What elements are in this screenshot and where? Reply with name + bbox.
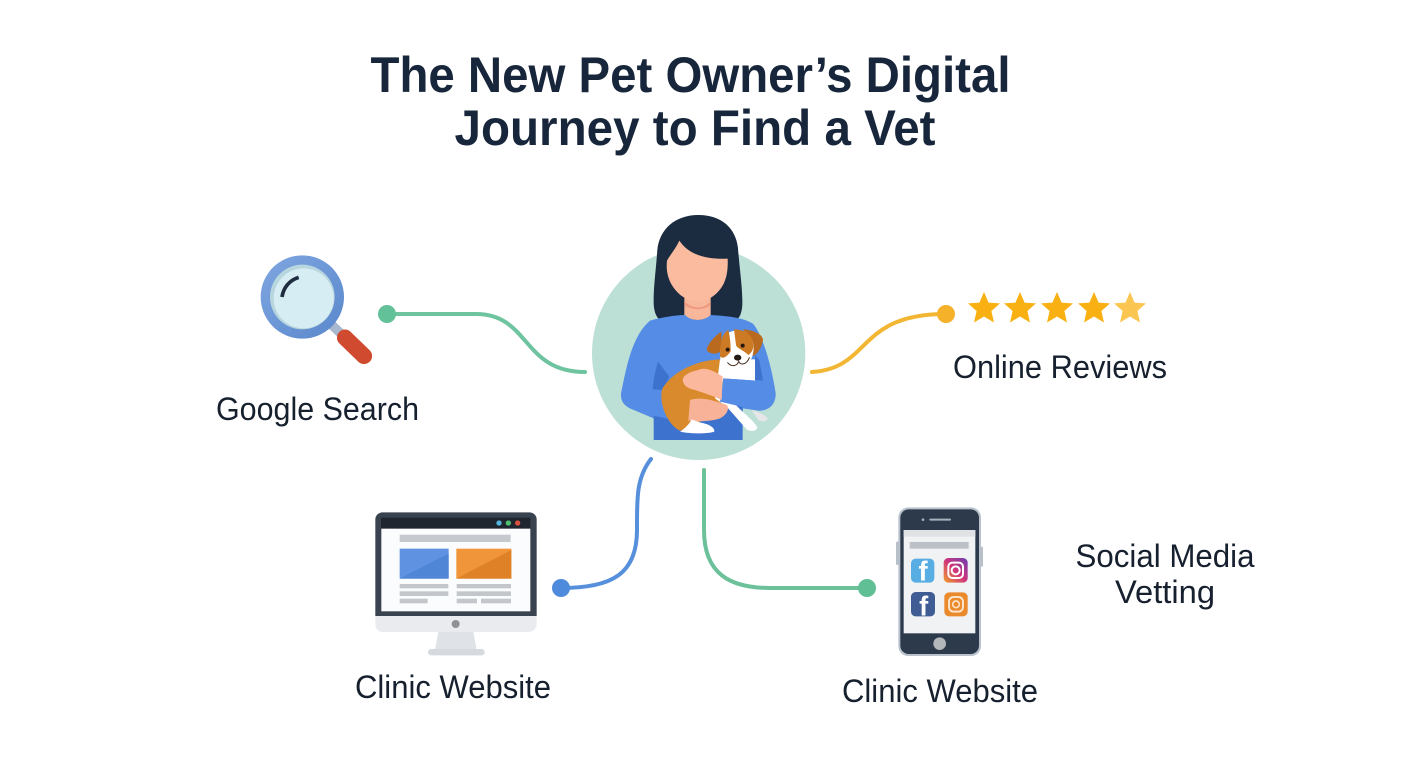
neck [684, 297, 711, 320]
sweater fold shadows [653, 362, 669, 390]
icon: Facebook dark [911, 590, 935, 621]
icon: smartphone with social apps [896, 507, 983, 656]
label: Social Media Vetting [1076, 538, 1255, 610]
puppy head [720, 330, 754, 370]
connector: person to Clinic Website [552, 459, 651, 597]
lower hand [688, 399, 728, 421]
icon: Instagram gradient [944, 558, 968, 583]
title [370, 47, 1010, 156]
left forearm [621, 389, 691, 422]
upper hand [683, 369, 723, 400]
connector: person to Google Search [378, 305, 585, 372]
label: Clinic Website (phone): Clinic Website [842, 673, 1038, 709]
puppy white chest and legs [715, 359, 757, 431]
sweater [621, 315, 776, 420]
icon: Facebook dark: f [919, 590, 929, 621]
hair [654, 215, 742, 320]
title: The New Pet Owner’s Digital [370, 47, 1010, 103]
icon: Instagram orange [944, 592, 968, 616]
icon: magnifying glass [261, 255, 364, 356]
near arm over puppy [720, 378, 775, 411]
lower torso [654, 397, 743, 440]
icon: five star rating [968, 292, 1146, 322]
icon: Facebook light [911, 556, 934, 587]
puppy body [661, 359, 730, 431]
puppy hind paw [680, 419, 714, 433]
background circle [592, 247, 805, 460]
label: Social Media Vetting: Vetting [1115, 574, 1215, 610]
label: Online Reviews: Online Reviews [953, 349, 1167, 385]
label: Social Media Vetting: Social Media [1076, 538, 1255, 574]
central figure: woman holding puppy [592, 215, 805, 460]
label: Google Search: Google Search [216, 391, 419, 427]
icon: Facebook light: f [918, 556, 928, 587]
puppy face details [726, 348, 730, 352]
connector: person to social media [704, 470, 876, 597]
label: Clinic Website (monitor): Clinic Website [355, 669, 551, 705]
icon: desktop monitor [375, 512, 537, 655]
puppy ears [707, 332, 722, 354]
title: Journey to Find a Vet [454, 100, 936, 156]
connector: person to Online Reviews [812, 305, 955, 372]
face [667, 241, 728, 301]
